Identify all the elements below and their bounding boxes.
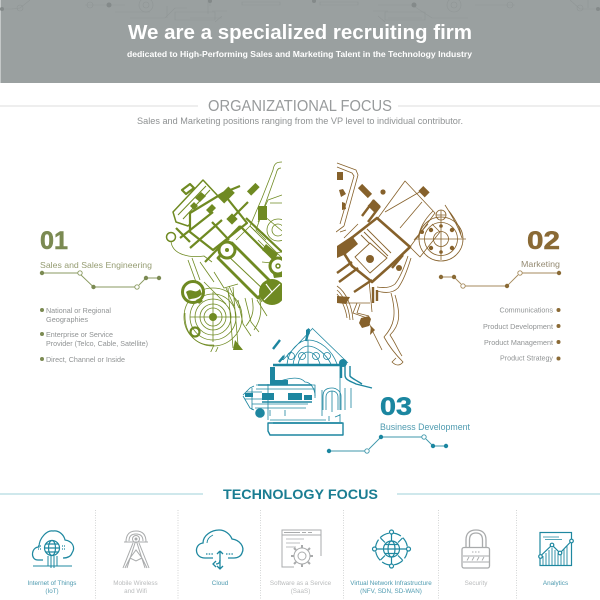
- number 02: 02: [527, 227, 560, 255]
- label: software as a service: (SaaS): [291, 588, 310, 595]
- label: mobile wireless: and Wifi: [124, 588, 147, 595]
- panel: 01 sales and sales engineering: [40, 227, 161, 364]
- label: cloud: Cloud: [212, 580, 229, 587]
- label: software as a service: Software as a Service: [270, 580, 332, 587]
- number 03: 03: [380, 393, 412, 421]
- bullet list: Enterprise or Service: [46, 330, 113, 339]
- bullet list: Geographies: [46, 315, 88, 324]
- bullet list: National or Regional: [46, 306, 111, 315]
- cylinder block: [340, 218, 410, 282]
- circuit line: [327, 435, 448, 453]
- connecting rod: [218, 243, 272, 298]
- upper cover plate: [173, 180, 218, 226]
- label: internet of things: (IoT): [45, 588, 59, 595]
- bullet list: Product Strategy: [500, 354, 553, 362]
- label: virtual network infrastructure: (NFV, SDN, SD-WAN): [360, 588, 422, 595]
- title: We are a specialized recruiting firm: [128, 21, 472, 44]
- header banner: [0, 0, 600, 83]
- bullet list: Communications: [500, 306, 553, 314]
- heading: technology focus: TECHNOLOGY FOCUS: [223, 486, 378, 502]
- panel: 03 business development: [327, 393, 471, 453]
- bullet list: Product Development: [483, 322, 553, 331]
- illustration: green engine: [166, 162, 289, 360]
- bullet list: [40, 306, 148, 364]
- bullet list: Direct, Channel or Inside: [46, 355, 125, 364]
- bullet list: Product Management: [484, 338, 553, 347]
- label: mobile wireless: Mobile Wireless: [113, 580, 158, 587]
- label: internet of things: Internet of Things: [28, 580, 76, 587]
- icon: analytics chart: [539, 532, 573, 566]
- number 01: 01: [40, 227, 68, 255]
- label: analytics: Analytics: [543, 580, 568, 587]
- label: security: Security: [465, 580, 488, 587]
- label: business development: Business Development: [380, 422, 471, 432]
- icon: internet of things: [32, 531, 74, 568]
- icon: mobile wireless tower: [123, 531, 149, 568]
- circuit line: [40, 271, 161, 289]
- heading: organizational focus: ORGANIZATIONAL FOCUS: [208, 98, 392, 115]
- circuit line: [439, 271, 561, 288]
- illustration: brown engine: [336, 163, 466, 365]
- icon: security lock: [462, 530, 490, 568]
- central block: [190, 193, 247, 250]
- illustration: teal engine: [243, 328, 372, 435]
- panel: 02 marketing: [439, 227, 561, 362]
- icon: software as a service: [282, 530, 321, 567]
- subtitle: dedicated to High-Performing Sales and Marketing Talent in the Technology Industry: [127, 49, 472, 59]
- organizational focus description: Sales and Marketing positions ranging from the VP level to individual contributor.: [137, 116, 463, 127]
- bullet list: Provider (Telco, Cable, Satellite): [46, 339, 148, 348]
- label: sales and sales engineering: Sales and Sales Engineering: [40, 260, 152, 270]
- icon: cloud: [196, 530, 243, 569]
- label: marketing: Marketing: [521, 259, 560, 269]
- bullet list: [483, 306, 560, 362]
- label: virtual network infrastructure: Virtual Network Infrastructure: [350, 580, 432, 587]
- icon: virtual network infrastructure: [372, 530, 410, 568]
